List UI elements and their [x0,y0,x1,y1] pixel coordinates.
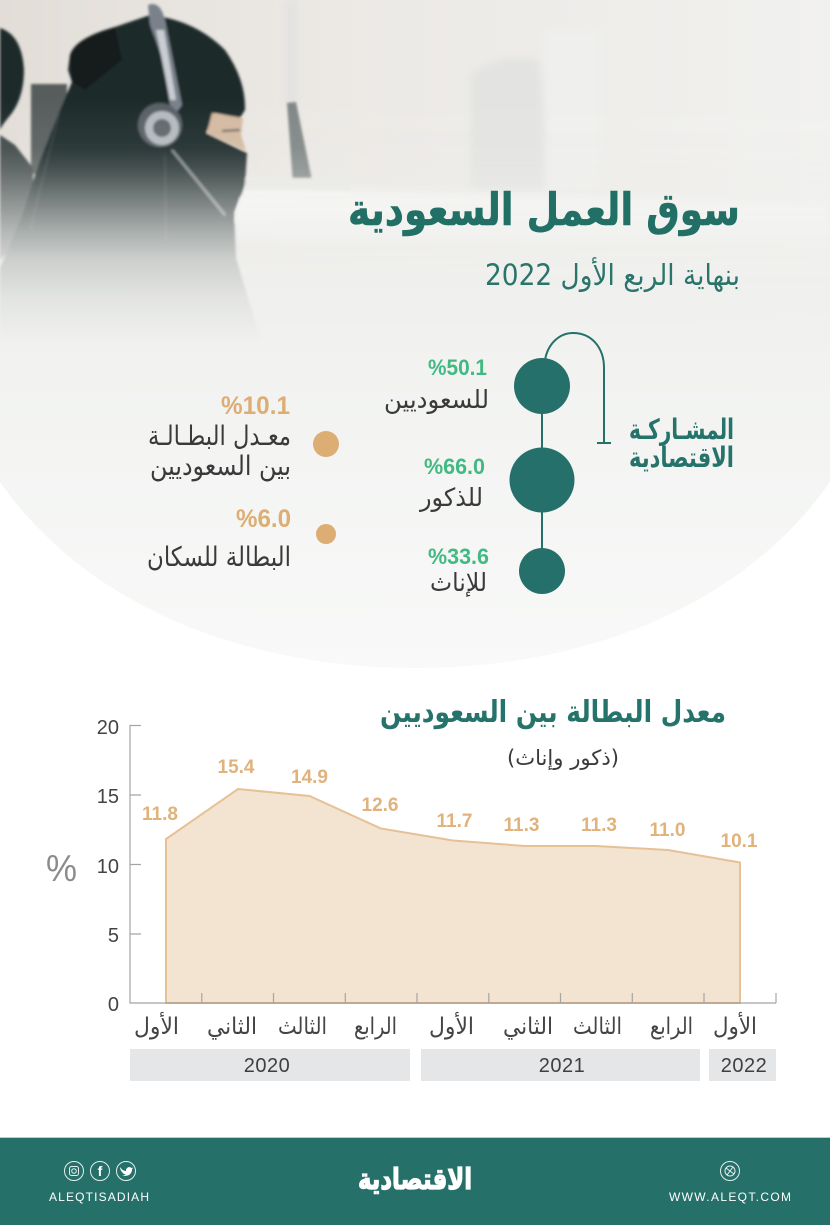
background: pale circular panel [0,0,830,668]
quarter labels: الثاني [207,1014,257,1040]
data values: 15.4 [218,757,255,778]
heading: economic participation: المشـاركـة [629,413,734,446]
heading: economic participation [629,413,734,474]
data values: 11.8 [142,804,178,825]
data values: 11.7 [437,811,472,832]
year band 2022 [709,1049,776,1081]
panel: unemployment [147,392,339,573]
stat: Saudi unemployment 10.1: معـدل البطـالـة [148,421,291,452]
data values [142,757,758,852]
y axis labels [97,717,119,1016]
stat: males 66.0: للذكور [418,483,483,512]
y axis labels: 15 [97,786,119,808]
icon: facebook: f [98,1163,103,1179]
title: سوق العمل السعودية [348,183,740,236]
heading: economic participation: الاقتصادية [629,441,734,474]
connector bracket [542,333,611,571]
quarter labels: الرابع [354,1014,397,1040]
bubble: Saudis [514,358,570,414]
bubble: females [519,548,565,594]
y axis unit: % [46,848,77,889]
y axis labels: 5 [108,925,119,947]
quarter labels: الثالث [278,1014,327,1040]
stat: Saudi unemployment 10.1 [148,392,291,482]
panel: economic participation [384,333,734,597]
chart heading: معدل البطالة بين السعوديين [380,695,726,730]
stat: females 33.6 [428,544,489,597]
stat: population unemployment 6.0: البطالة للسكان [147,542,291,573]
data values: 14.9 [291,767,328,788]
icon: website [720,1162,740,1180]
stat: males 66.0 [418,454,485,512]
area: unemployment rate [166,789,740,1003]
year band 2020: 2020 [244,1055,290,1077]
area chart [46,717,776,1081]
y axis labels: 20 [97,717,119,739]
year band 2020 [130,1049,410,1081]
stat: Saudi unemployment 10.1: %10.1 [221,392,290,420]
stat: Saudis 50.1 [384,355,489,414]
icon: facebook [90,1162,110,1180]
icon: instagram [64,1162,84,1180]
chart subheading: (ذكور وإناث) [507,746,619,771]
year band 2021 [421,1049,700,1081]
quarter labels: الرابع [650,1014,693,1040]
stat: population unemployment 6.0 [147,505,291,573]
y axis labels: 10 [97,856,119,878]
quarter labels: الأول [713,1012,757,1040]
dot: population unemployment [316,524,336,544]
photo: woman with headset, fading out [0,0,542,317]
quarter labels: الثالث [573,1014,622,1040]
year band 2021: 2021 [539,1055,585,1077]
dot: Saudi unemployment [313,431,339,457]
data values: 12.6 [362,795,398,816]
footer [0,1137,830,1225]
stat: Saudi unemployment 10.1: بين السعوديين [150,451,291,482]
axes [130,726,776,1003]
y axis labels: 0 [108,994,119,1016]
quarter labels: الأول [429,1012,474,1040]
data values: 11.3 [504,815,539,836]
data values: 11.3 [581,815,617,836]
icon: twitter [116,1162,136,1180]
bubble: males [510,448,574,512]
stat: Saudis 50.1: %50.1 [428,355,487,380]
stat: females 33.6: %33.6 [428,544,489,569]
stat: Saudis 50.1: للسعوديين [384,385,489,414]
quarter labels: الثاني [503,1014,553,1040]
logo: الاقتصادية [358,1162,472,1196]
handle text: ALEQTISADIAH [49,1190,149,1204]
data values: 10.1 [721,831,758,852]
data values: 11.0 [650,820,685,841]
year band 2022: 2022 [721,1055,767,1077]
stat: females 33.6: للإناث [430,568,487,597]
stat: males 66.0: %66.0 [424,454,485,479]
subtitle: بنهاية الربع الأول 2022 [485,256,740,292]
stat: population unemployment 6.0: %6.0 [236,505,291,533]
quarter labels: الأول [134,1012,179,1040]
quarter labels [134,1012,757,1040]
website text: WWW.ALEQT.COM [669,1190,791,1204]
